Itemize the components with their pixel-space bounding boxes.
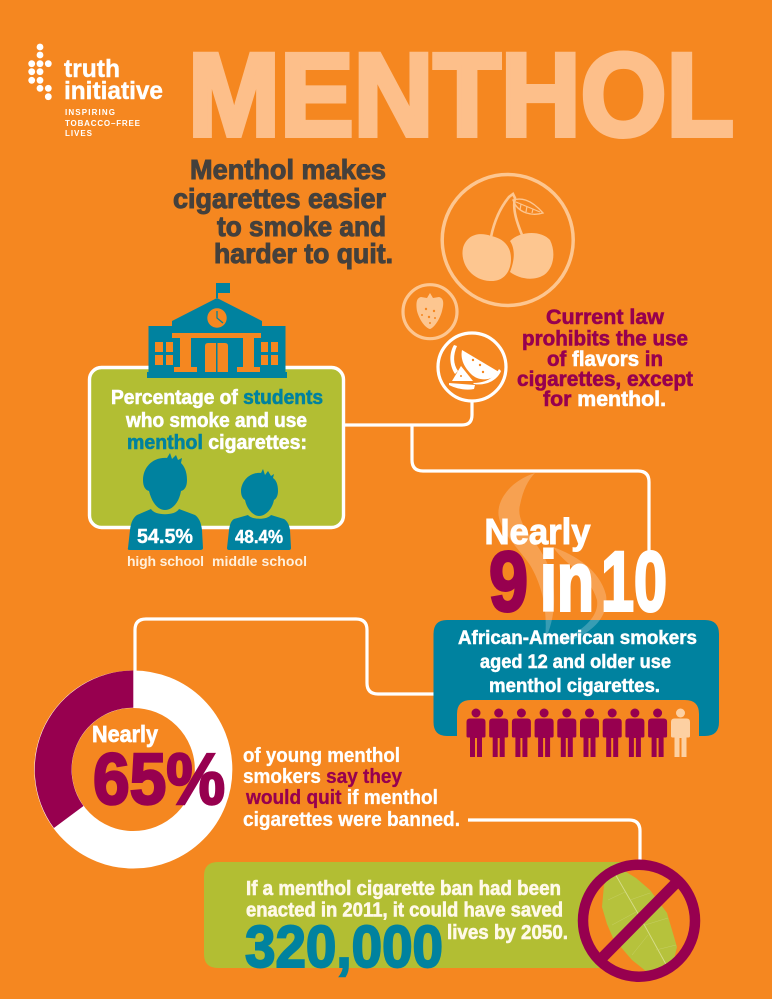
icon: middle school student: 48.4% bbox=[235, 527, 283, 547]
text: young menthol smokers would quit: smokers say they bbox=[243, 766, 403, 788]
stat: nearly 9 in 10: 9 bbox=[489, 534, 528, 628]
text: percentage of students bbox=[111, 387, 323, 454]
heading: menthol makes cigarettes easier: to smoke and bbox=[217, 211, 386, 242]
text: percentage of students: who smoke and use bbox=[125, 410, 307, 432]
labels: high school and middle school bbox=[127, 553, 307, 569]
icon row: ten people bbox=[466, 708, 690, 757]
heading: menthol makes cigarettes easier bbox=[173, 154, 393, 269]
logo: truth initiative bbox=[28, 44, 163, 138]
text: african-american smokers: aged 12 and older use bbox=[480, 652, 671, 673]
text: menthol ban lives saved bbox=[246, 878, 568, 944]
panel: ban savings bbox=[204, 862, 640, 980]
connector: students box to watermelon and 9 in 10 bbox=[345, 401, 649, 554]
text: young menthol smokers would quit: of young menthol bbox=[243, 745, 400, 767]
icon: school building bbox=[147, 283, 287, 378]
stat: 320,000: 320,000 bbox=[245, 914, 443, 980]
labels: high school and middle school: middle school bbox=[212, 553, 307, 569]
text: menthol ban lives saved: lives by 2050. bbox=[447, 922, 568, 944]
text: young menthol smokers would quit bbox=[243, 745, 460, 831]
callout: current law prohibits flavors: prohibits the use bbox=[522, 328, 688, 350]
text: young menthol smokers would quit: would quit if menthol bbox=[245, 787, 438, 809]
logo: truth initiative: LIVES bbox=[65, 129, 93, 138]
panel: african-american box bbox=[434, 620, 719, 736]
icon: middle school student bbox=[227, 469, 291, 550]
labels: high school and middle school: high school bbox=[127, 553, 204, 569]
text: african-american smokers: menthol cigarettes. bbox=[489, 676, 660, 697]
stat: nearly 9 in 10: Nearly bbox=[484, 511, 590, 552]
callout: current law prohibits flavors: cigarettes, except bbox=[517, 368, 693, 391]
callout: current law prohibits flavors bbox=[517, 306, 693, 411]
icon: banned mint leaf bbox=[583, 865, 695, 977]
heading: menthol makes cigarettes easier: Menthol makes bbox=[190, 154, 386, 185]
text: african-american smokers: African-American smokers bbox=[458, 628, 697, 649]
stat: nearly 9 in 10: in bbox=[540, 534, 594, 628]
icon: high school student: 54.5% bbox=[137, 526, 193, 548]
logo: truth initiative: truth bbox=[64, 55, 120, 83]
callout: current law prohibits flavors: of flavors in bbox=[547, 348, 663, 371]
heading: menthol makes cigarettes easier: harder to quit. bbox=[214, 238, 393, 269]
icon: cherry in circle bbox=[442, 174, 573, 306]
stat: nearly 9 in 10 bbox=[484, 511, 667, 628]
stat: nearly 65 percent: Nearly bbox=[92, 721, 158, 747]
icon: watermelon in circle bbox=[438, 333, 506, 401]
text: percentage of students: Percentage of students bbox=[111, 387, 323, 409]
stat: nearly 65 percent: 65% bbox=[93, 740, 225, 820]
stat: nearly 9 in 10: 10 bbox=[601, 534, 667, 628]
panel: students bbox=[90, 283, 344, 569]
decoration: smoke wisp bbox=[498, 473, 606, 645]
connector: banned text to ban icon bbox=[468, 820, 640, 864]
donut chart: 65 percent bbox=[35, 670, 214, 850]
icon: high school student bbox=[128, 453, 203, 550]
logo: truth initiative: TOBACCO–FREE bbox=[65, 119, 141, 128]
logo: truth initiative: INSPIRING bbox=[65, 108, 115, 117]
heading: menthol makes cigarettes easier: cigarettes easier bbox=[173, 183, 386, 214]
icon: strawberry in circle bbox=[403, 285, 457, 339]
callout: current law prohibits flavors: Current law bbox=[546, 306, 665, 329]
connector: donut to african-american box bbox=[135, 619, 434, 694]
text: menthol ban lives saved: If a menthol cigarette ban had been bbox=[246, 878, 561, 900]
title: MENTHOL bbox=[188, 30, 734, 162]
logo: truth initiative: initiative bbox=[64, 77, 163, 105]
callout: current law prohibits flavors: for menthol. bbox=[543, 388, 666, 411]
text: young menthol smokers would quit: cigarettes were banned. bbox=[243, 809, 460, 831]
text: menthol ban lives saved: enacted in 2011, it could have saved bbox=[246, 900, 563, 922]
text: african-american smokers bbox=[458, 628, 697, 697]
text: percentage of students: menthol cigarettes: bbox=[127, 432, 307, 454]
